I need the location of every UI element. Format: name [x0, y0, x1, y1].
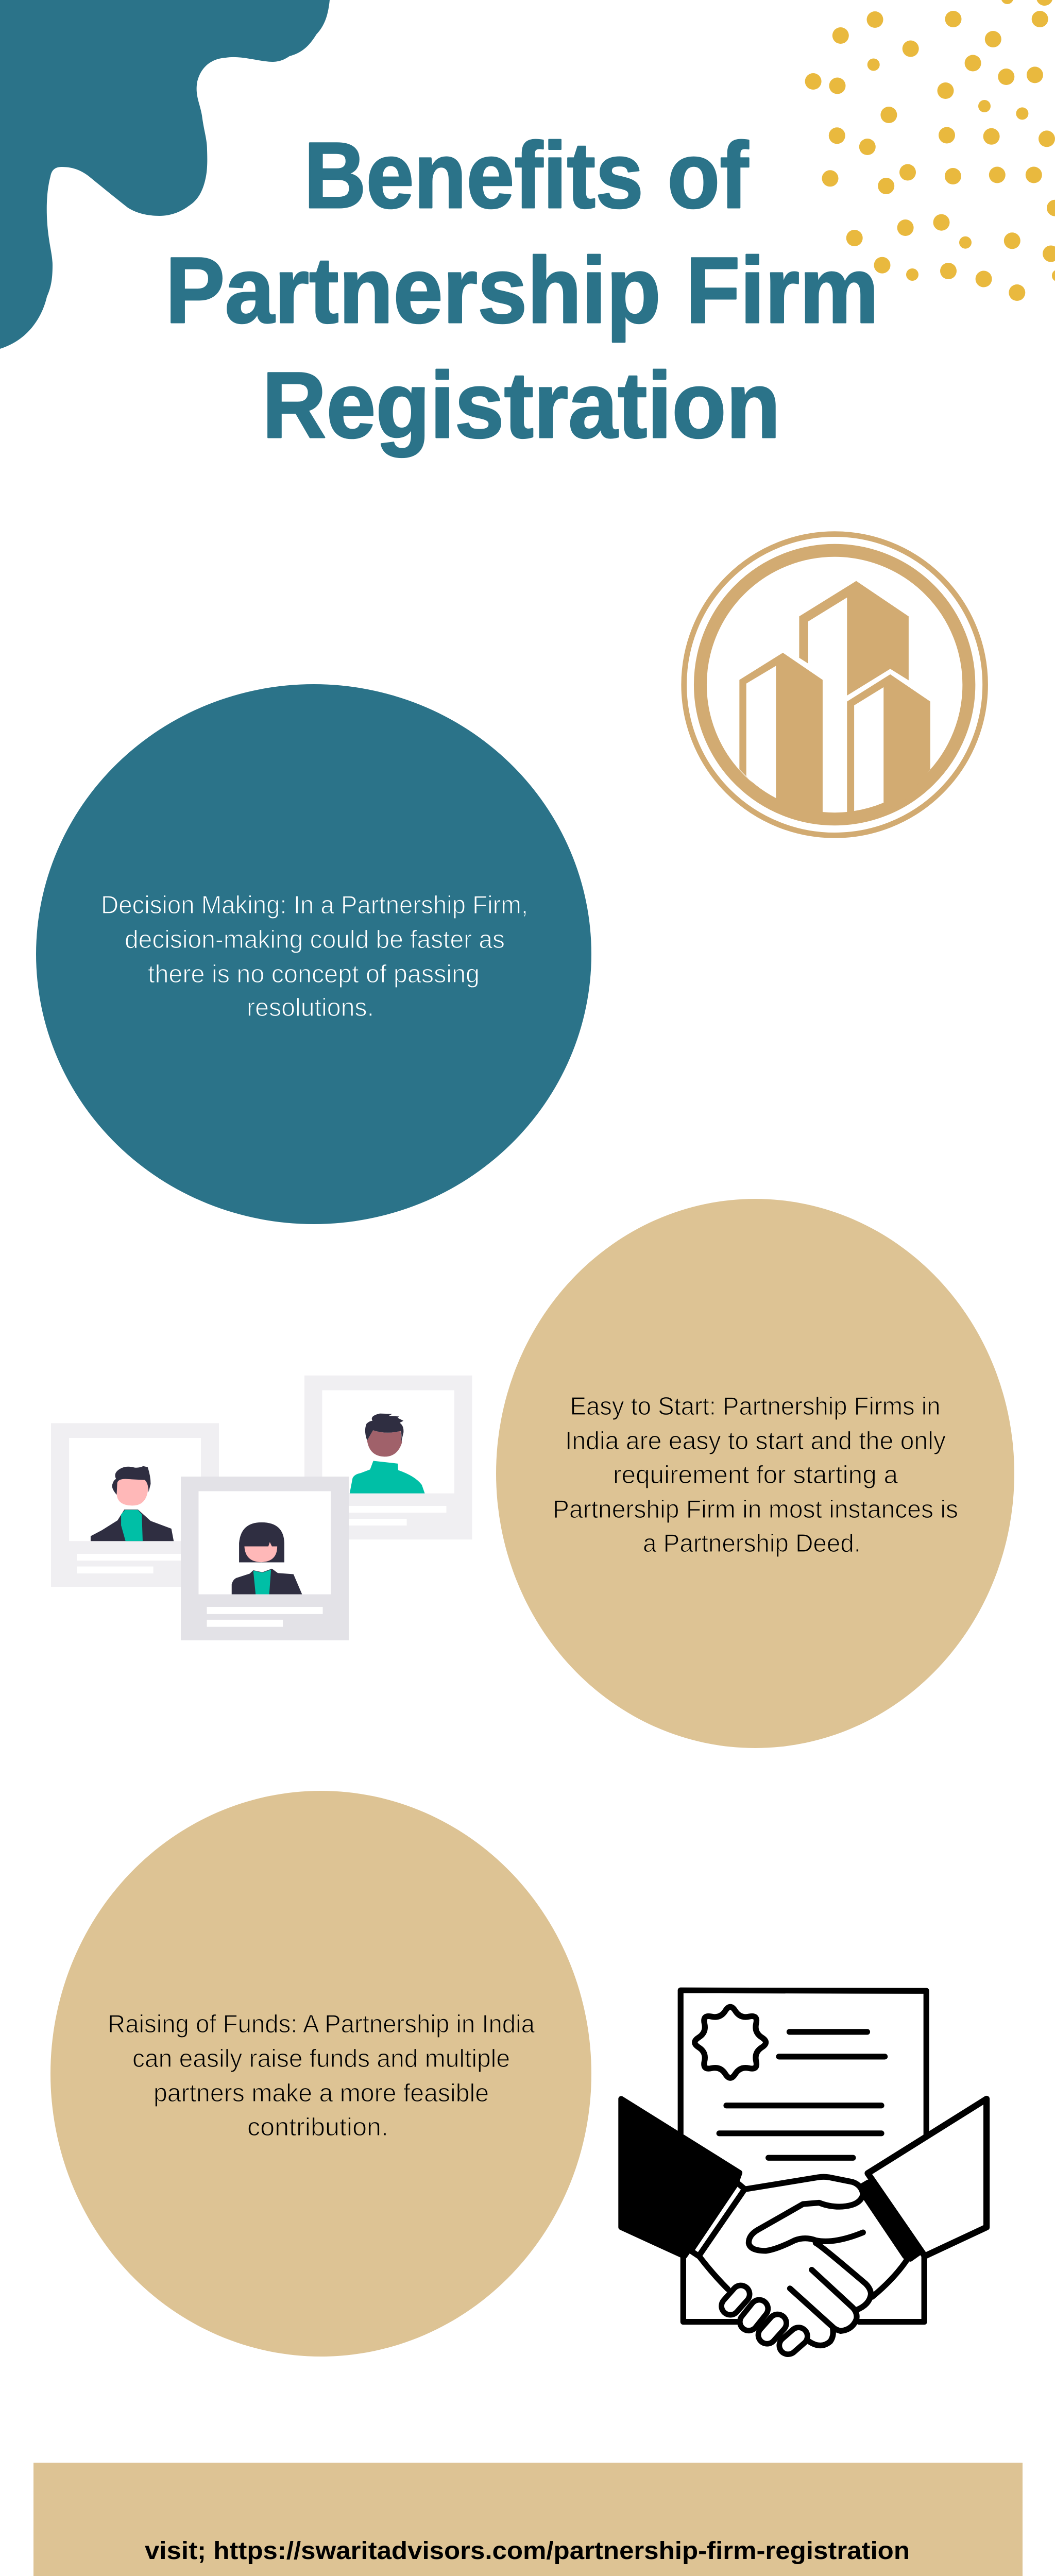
profile card: right man	[304, 1376, 472, 1539]
decorative teal blob top left	[0, 0, 330, 349]
text: raising of funds: partners make a more feasible	[154, 2079, 489, 2107]
left black sleeve	[621, 2099, 740, 2256]
text: easy to start: requirement for starting a	[613, 1461, 898, 1489]
left cuff	[691, 2182, 745, 2256]
title: Partnership Firm	[165, 238, 879, 343]
panel: easy to start circle	[496, 1199, 1014, 1748]
text: raising of funds	[108, 2010, 535, 2141]
title: Registration	[262, 352, 780, 457]
text: easy to start	[553, 1393, 958, 1557]
contract document	[680, 1990, 926, 2322]
text: decision making: Decision Making: In a Partnership Firm,	[101, 891, 528, 919]
decorative yellow dots top right	[805, 0, 1055, 301]
fingers	[730, 2294, 798, 2346]
text: decision making: resolutions.	[247, 994, 374, 1022]
text: easy to start: a Partnership Deed.	[643, 1530, 861, 1557]
text: easy to start: Easy to Start: Partnership Firms in	[570, 1393, 941, 1420]
footer link text: visit; https://swaritadvisors.com/partnership-firm-registration	[145, 2537, 910, 2565]
text: easy to start: India are easy to start and the only	[565, 1427, 946, 1455]
icon: gold buildings emblem	[684, 534, 985, 835]
text: decision making	[101, 891, 528, 1022]
right white sleeve	[867, 2099, 986, 2256]
text: decision making: there is no concept of passing	[148, 960, 480, 988]
title	[165, 123, 879, 457]
panel: raising of funds circle	[50, 1791, 591, 2357]
panel: decision making circle	[36, 684, 591, 1224]
text: raising of funds: contribution.	[247, 2113, 388, 2141]
icon: three profile cards	[51, 1376, 472, 1640]
icon: handshake over contract	[621, 1990, 986, 2346]
footer banner	[33, 2463, 1023, 2576]
title: Benefits of	[304, 123, 748, 228]
text: decision making: decision-making could be faster as	[125, 926, 505, 954]
text: raising of funds: Raising of Funds: A Partnership in India	[108, 2010, 535, 2038]
text: easy to start: Partnership Firm in most instances is	[553, 1496, 958, 1523]
right black cuff	[862, 2182, 920, 2259]
text: raising of funds: can easily raise funds and multiple	[132, 2045, 510, 2073]
clasped hands	[700, 2177, 908, 2346]
profile card: middle woman	[181, 1477, 349, 1640]
profile card: left man	[51, 1423, 219, 1587]
